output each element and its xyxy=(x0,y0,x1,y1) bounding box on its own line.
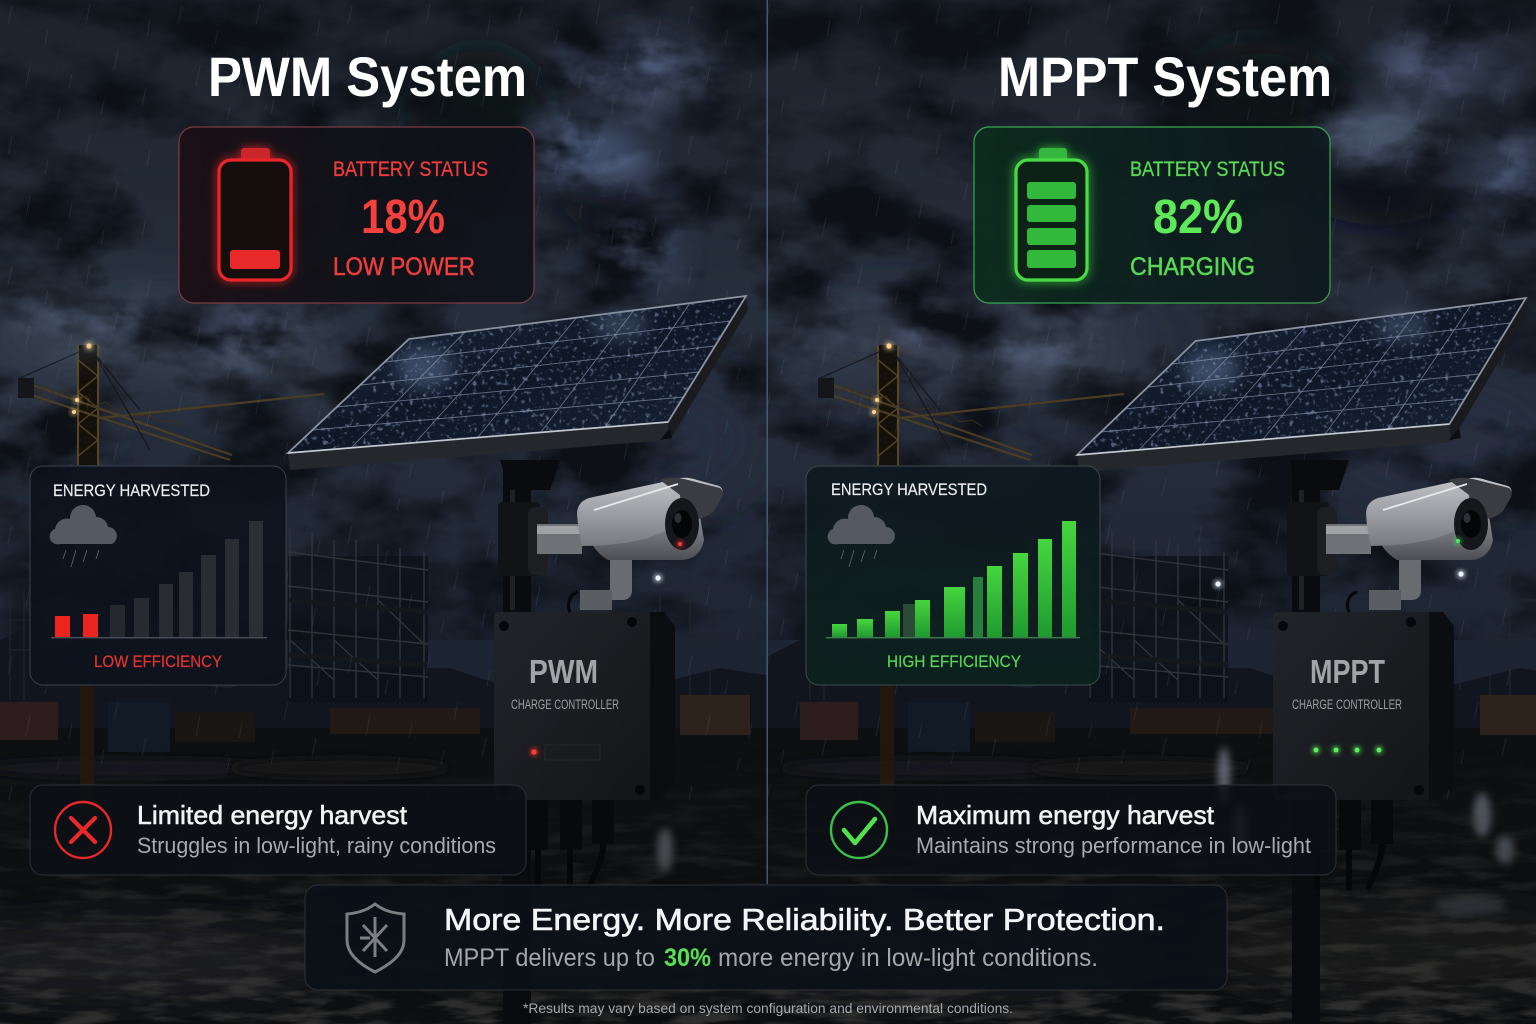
bar chart: high efficiency xyxy=(826,521,1080,638)
divider between systems xyxy=(766,0,768,884)
title: MPPT System: MPPT System xyxy=(998,45,1332,108)
panel: conclusion: 30% xyxy=(664,944,711,972)
title: PWM System: PWM System xyxy=(208,45,527,108)
panel: MPPT energy harvested: HIGH EFFICIENCY xyxy=(887,652,1021,671)
label: MPPT controller: MPPT xyxy=(1310,653,1385,690)
panel: PWM energy harvested: ENERGY HARVESTED xyxy=(53,481,210,500)
icon: rain cloud xyxy=(50,505,117,567)
panel: MPPT verdict: Maximum energy harvest xyxy=(916,800,1215,830)
background: MPPT side stormy construction site xyxy=(700,0,1536,1024)
icon: low battery xyxy=(219,148,291,280)
label: MPPT controller: CHARGE CONTROLLER xyxy=(1292,697,1402,712)
panel: MPPT energy harvested: ENERGY HARVESTED xyxy=(831,480,987,499)
label: PWM controller: CHARGE CONTROLLER xyxy=(511,697,619,712)
label: PWM controller: PWM xyxy=(529,653,598,690)
panel: PWM battery status xyxy=(179,127,534,303)
icon: charged battery xyxy=(1016,148,1087,280)
panel: conclusion: More Energy. More Reliability. Better Protection. xyxy=(444,902,1165,937)
equipment: PWM controller box xyxy=(494,592,675,890)
panel: conclusion: more energy in low-light conditions. xyxy=(718,944,1098,972)
icon: green check xyxy=(831,802,887,858)
panel: PWM verdict xyxy=(30,785,526,875)
indicator: PWM camera red LED xyxy=(678,542,682,546)
panel: PWM energy harvested xyxy=(30,466,286,685)
icon: street lights xyxy=(1215,571,1464,587)
background: PWM side stormy construction site xyxy=(0,0,766,1004)
sky highlights: bright storm-cloud texture xyxy=(8,18,1536,374)
panel: MPPT energy harvested xyxy=(806,466,1100,685)
panel: MPPT verdict: Maintains strong performance in low-light xyxy=(916,833,1311,858)
label: MPPT controller xyxy=(1292,653,1402,752)
panel: PWM verdict: Limited energy harvest xyxy=(137,800,408,830)
panel: MPPT battery status: CHARGING xyxy=(1130,253,1255,281)
panel: PWM energy harvested: LOW EFFICIENCY xyxy=(94,652,222,671)
bar chart: low efficiency xyxy=(51,521,267,638)
equipment: MPPT solar panel xyxy=(1077,298,1528,472)
panel: conclusion: MPPT delivers up to xyxy=(444,944,655,972)
label: PWM controller xyxy=(511,653,619,760)
footnote: *Results may vary based on system configuration and environmental conditions. xyxy=(523,1000,1013,1016)
indicator: MPPT camera green LED xyxy=(1456,539,1460,543)
equipment: PWM pole and camera xyxy=(498,428,723,1024)
icon: red cross xyxy=(55,802,111,858)
panel: PWM battery status: BATTERY STATUS xyxy=(333,158,488,181)
equipment: PWM solar panel xyxy=(288,296,748,470)
icon: street light xyxy=(655,575,661,581)
equipment: MPPT controller box xyxy=(1273,592,1454,890)
panel: PWM battery status: LOW POWER xyxy=(333,253,475,281)
panel: PWM verdict: Struggles in low-light, rainy conditions xyxy=(137,833,496,858)
panel: MPPT verdict xyxy=(806,785,1336,875)
panel: conclusion xyxy=(305,885,1227,990)
icon: rain cloud xyxy=(828,505,895,567)
panel: MPPT battery status: BATTERY STATUS xyxy=(1130,158,1285,181)
panel: MPPT battery status: 82% xyxy=(1153,191,1243,244)
panel: PWM battery status: 18% xyxy=(361,191,445,244)
equipment: MPPT pole and camera xyxy=(1287,428,1512,1024)
icon: shield xyxy=(347,904,404,972)
ground: wet mottled texture xyxy=(0,818,1536,1024)
panel: MPPT battery status xyxy=(974,127,1330,303)
